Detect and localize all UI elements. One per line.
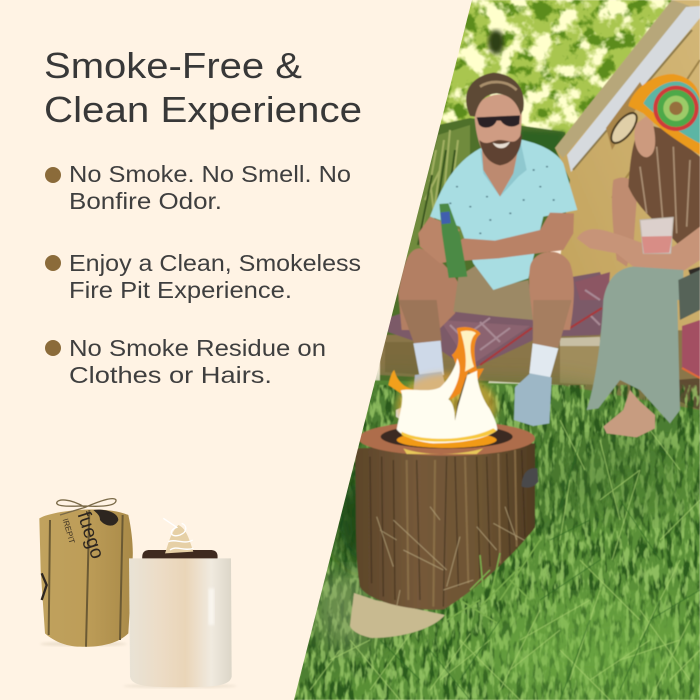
man's head bbox=[466, 73, 524, 165]
beer bottle bbox=[439, 203, 467, 278]
stump body bbox=[355, 443, 535, 610]
alabaster fire pit bbox=[129, 518, 232, 687]
photo: campfire scene bbox=[285, 0, 700, 700]
bench bbox=[380, 330, 700, 415]
trees backdrop bbox=[380, 0, 700, 200]
bullet 2: Enjoy a Clean, Smokeless bbox=[69, 250, 361, 276]
feet and shoes bbox=[396, 267, 700, 437]
skirt shadow bbox=[678, 270, 700, 320]
man's shins bbox=[398, 300, 572, 347]
woman bbox=[577, 74, 700, 275]
kraft paper wrap bbox=[39, 499, 133, 647]
twine bbox=[49, 510, 123, 647]
grass covering the stump base bbox=[445, 528, 550, 636]
wood base slab bbox=[350, 593, 445, 638]
sneakers bbox=[396, 372, 552, 426]
socks bbox=[413, 341, 558, 378]
tent bbox=[555, 0, 700, 345]
shirt bbox=[430, 139, 577, 290]
product: paper-wrapped fire pit and alabaster fire pit bbox=[39, 499, 237, 688]
lawn bbox=[285, 380, 700, 700]
woman's feet bbox=[603, 390, 655, 437]
cushions bbox=[388, 272, 700, 378]
man bbox=[398, 73, 577, 330]
bullet 1 bbox=[45, 161, 351, 214]
woman's face bbox=[634, 113, 655, 157]
man's right leg bbox=[529, 252, 574, 330]
cream text panel bbox=[0, 0, 472, 700]
bullet 2 bbox=[45, 250, 361, 303]
title: Smoke-Free & bbox=[44, 45, 302, 86]
stump top rim bbox=[358, 421, 535, 456]
metal handle bbox=[522, 468, 538, 488]
logo mark bbox=[93, 510, 118, 526]
twine bow bbox=[57, 499, 116, 515]
bullet 2: Fire Pit Experience. bbox=[69, 277, 292, 303]
fire pit stump bbox=[355, 327, 538, 610]
crochet hat bbox=[628, 74, 700, 155]
man's arms bbox=[418, 213, 574, 263]
side mark bbox=[42, 573, 47, 600]
bullet 1: No Smoke. No Smell. No bbox=[69, 161, 351, 187]
bullet 3 bbox=[45, 335, 326, 388]
woman's hair and arm bbox=[612, 123, 700, 267]
man's left leg bbox=[398, 248, 460, 330]
metal ring bbox=[381, 425, 513, 449]
man's neck bbox=[482, 140, 520, 197]
flames bbox=[388, 327, 497, 443]
firepit label: IREPIT bbox=[61, 517, 77, 545]
bullet 3: Clothes or Hairs. bbox=[69, 362, 272, 388]
woman's top bbox=[688, 267, 700, 275]
bullet list bbox=[45, 161, 361, 388]
hedge and tall grass bbox=[380, 118, 575, 400]
title: Clean Experience bbox=[44, 89, 362, 130]
woman's arm and wine glass bbox=[577, 217, 700, 273]
ground shadows bbox=[40, 642, 237, 688]
bullet 3: No Smoke Residue on bbox=[69, 335, 326, 361]
brand name: fuego bbox=[73, 509, 107, 562]
dry grass seed heads bbox=[377, 507, 530, 607]
title bbox=[44, 45, 362, 130]
bark grain bbox=[370, 450, 525, 607]
fire glow bbox=[397, 432, 497, 448]
skirt bbox=[587, 267, 683, 423]
shorts bbox=[453, 265, 533, 320]
bullet 1: Bonfire Odor. bbox=[69, 188, 222, 214]
